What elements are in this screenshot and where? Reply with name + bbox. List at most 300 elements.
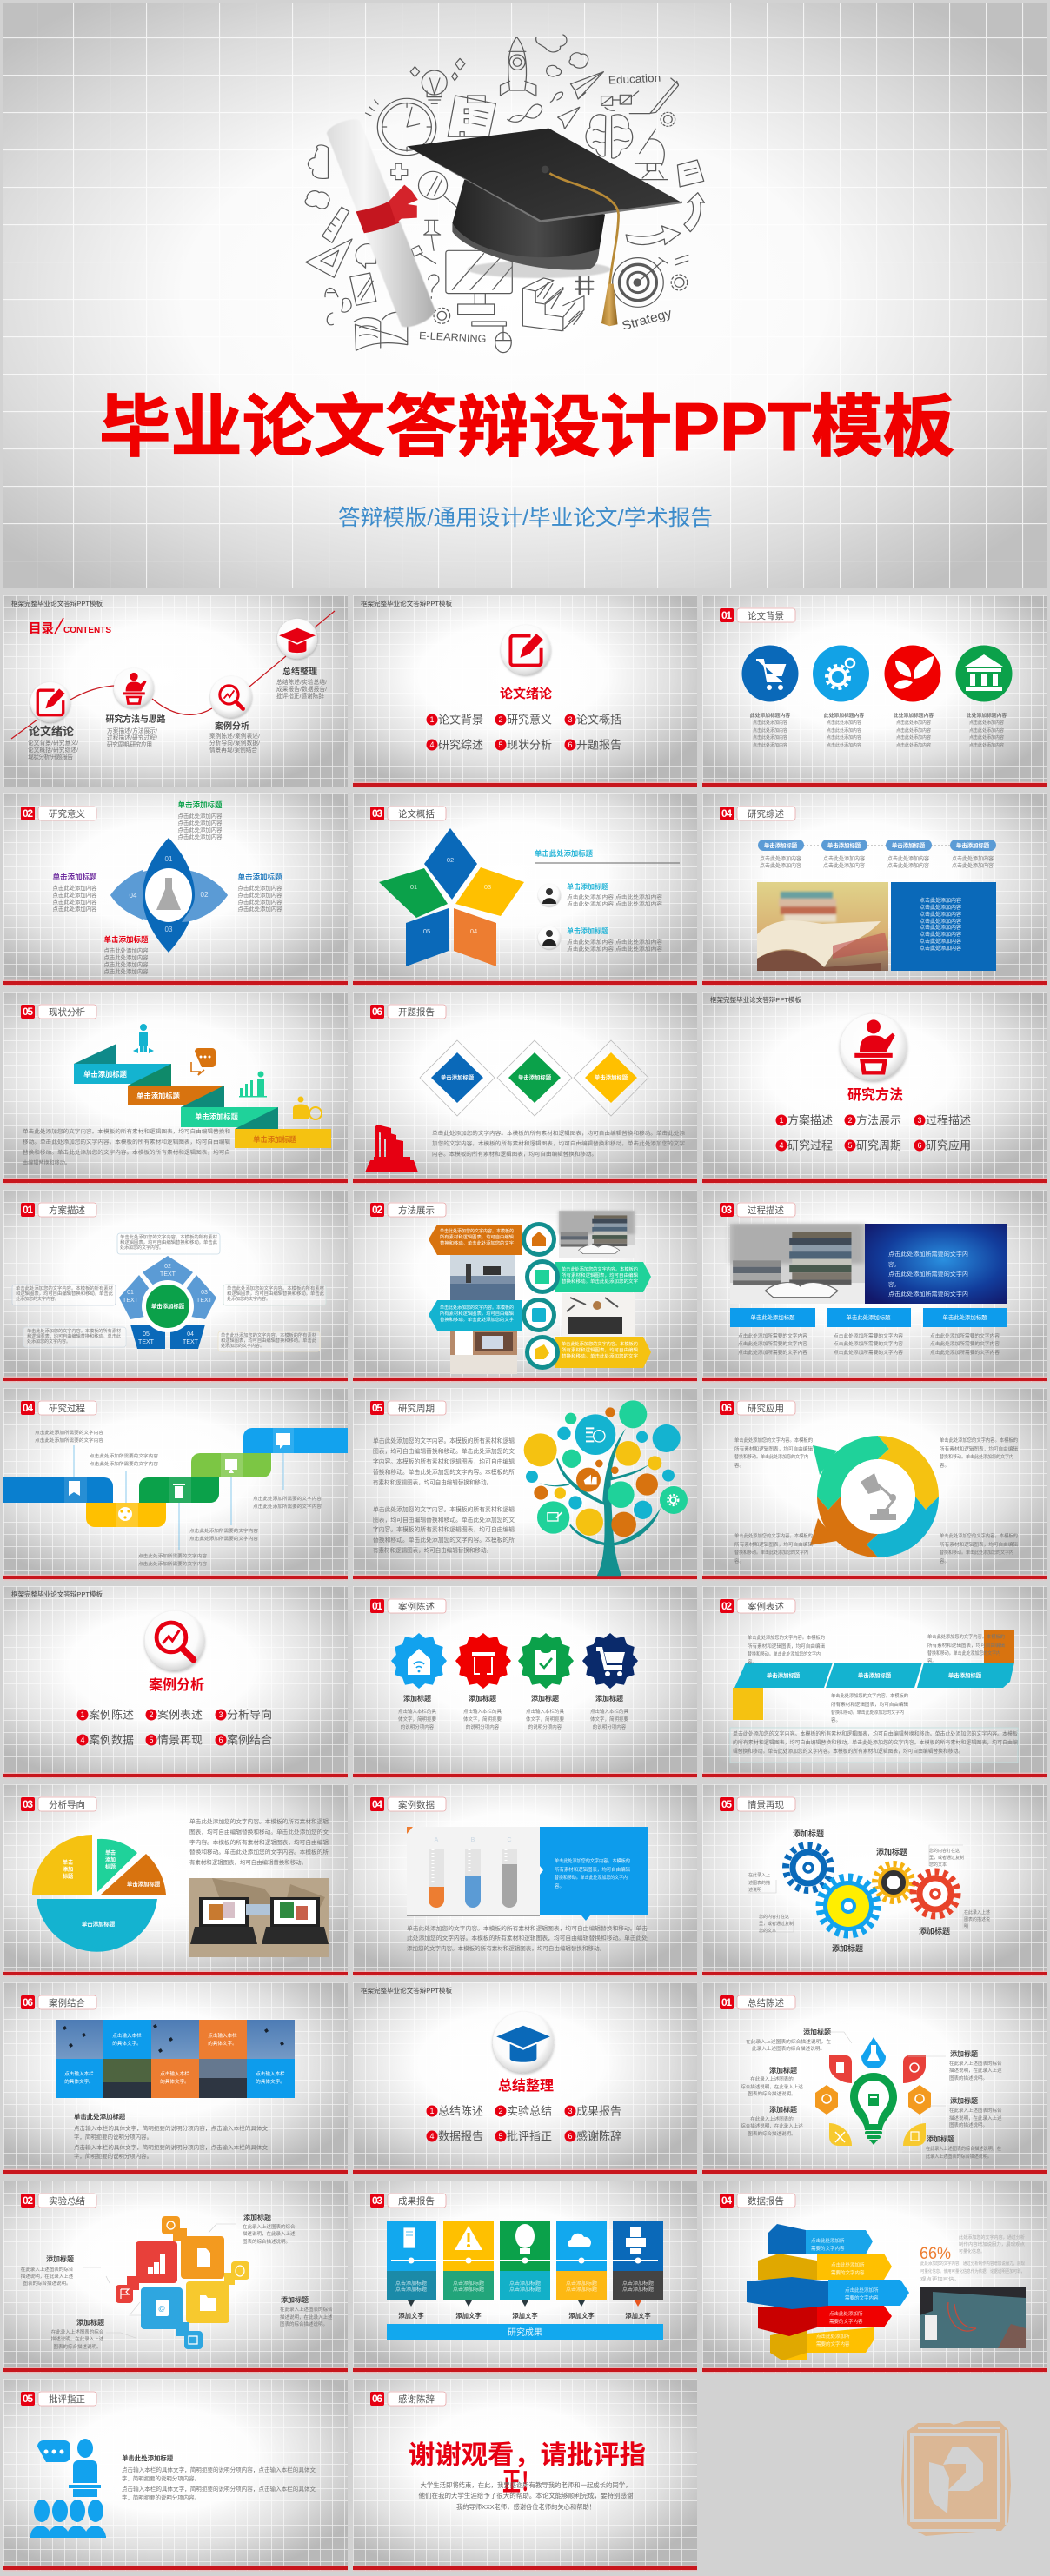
photo and text grid: 的具体文字。 <box>160 2078 189 2085</box>
panel: 现状分析 <box>3 992 348 1184</box>
panel: 论文背景 <box>702 595 1047 787</box>
text labels: 添加标题 <box>927 2134 954 2143</box>
section list: 过程描述 <box>926 1114 971 1126</box>
panel: 研究应用 <box>702 1388 1047 1580</box>
arrows with text: 替换和移动。单击此处添加您的文字 <box>562 1278 638 1285</box>
panel: section 案例分析 <box>3 1586 348 1778</box>
small notes with leaders <box>748 1845 990 1934</box>
three blue boxes: 单击此处添加标题 <box>846 1313 891 1321</box>
paragraphs: 替换和移动。单击此处添加您的文字内 <box>734 1453 808 1460</box>
closing message: 正！ <box>502 2468 539 2497</box>
header tag: 01 <box>721 609 732 621</box>
paragraph: 添加您的文字内容。本模板的所有素材和逻辑图表，均可自由编辑替换和移动。 <box>407 1944 605 1952</box>
paragraphs: 容。 <box>734 1462 744 1469</box>
diagram: pentagon cycle: TEXT <box>183 1339 199 1345</box>
pills row: 点击此处添加内容 <box>823 855 865 862</box>
labels: 点击此处添加内容 <box>827 742 861 748</box>
labels: 的说明分项内容 <box>528 1723 562 1730</box>
diagram: pentagon cycle: TEXT <box>160 1271 176 1278</box>
labels: 点击此处添加内容 <box>237 891 282 899</box>
step: 研究方法与思路 <box>106 668 165 748</box>
paragraphs: 单击此处添加您的文字内容。本模板的所有素材和逻辑 <box>373 1505 515 1513</box>
three blue boxes: 单击此处添加标题 <box>942 1313 987 1321</box>
blue text panel: 点击此处添加所需要的文字内 <box>888 1250 968 1258</box>
text block: 点击输入本栏的具体文字，简明扼要的说明分项内容，点击输入本栏的具体文 <box>122 2485 316 2493</box>
header tag <box>720 807 795 820</box>
section list: 案例结合 <box>227 1733 272 1747</box>
header tag <box>370 2392 446 2406</box>
pills row: 单击添加标题 <box>764 841 798 849</box>
labels: 点击此处添加内容 <box>827 727 861 734</box>
small notes with leaders: 里，或者通过复制 <box>759 1921 794 1927</box>
three blue boxes: 点击此处添加所需要的文字内容 <box>738 1332 808 1339</box>
diagram: stacked arrows: 需要的文字内容 <box>829 2318 863 2325</box>
pills row: 点击此处添加内容 <box>760 862 801 869</box>
text labels: 综合描述说明，在此录入上述 <box>741 2083 803 2090</box>
pills row: 点击此处添加内容 <box>952 862 994 869</box>
text block: 单击此处添加标题 <box>122 2454 174 2462</box>
labels: 单击添加标题 <box>103 935 149 944</box>
bordered summary <box>730 1728 1018 1763</box>
text blocks: 所有素材和逻辑图表，均可自由编辑 <box>748 1643 825 1650</box>
section list: 情景再现 <box>157 1733 203 1747</box>
panel: 研究过程 <box>3 1388 348 1580</box>
header tag <box>21 807 96 820</box>
labels: 点击输入本栏的具 <box>590 1708 628 1715</box>
header tag <box>370 1599 446 1613</box>
diagram: stacked arrows: 需要的文字内容 <box>845 2294 879 2301</box>
template label: 框架完整毕业论文答辩PPT模板 <box>710 995 801 1004</box>
labels: 此处添加标题内容 <box>824 712 864 719</box>
chart: test tubes: A <box>435 1837 439 1843</box>
five columns: 点击添加标题 <box>622 2280 654 2287</box>
text labels: 图表的综合描述说明。 <box>53 2343 102 2350</box>
section list: 1 <box>80 1710 85 1719</box>
callout boxes <box>12 1233 326 1351</box>
paragraph: 单击此处添加您的文字内容。本模板的所有素材和逻辑图表，均可自由编辑替换和移动。单击此处添 <box>432 1130 685 1137</box>
diagram: four petals: 02 <box>201 891 209 899</box>
section list: 成果报告 <box>576 2105 621 2117</box>
small notes with leaders: 明 <box>964 1924 968 1929</box>
header tag: 方案描述 <box>49 1205 85 1216</box>
icon: speaker ball <box>841 1014 907 1080</box>
blue text panel: 点击此处添加内容 <box>920 931 961 938</box>
panel: 方案描述 <box>3 1190 348 1382</box>
paragraphs: 所有素材和逻辑图表，均可自由编辑 <box>940 1541 1018 1548</box>
illustration: doodles, diploma and graduation cap <box>305 35 704 353</box>
text labels: 描述说明，在此录入上述 <box>280 2314 333 2320</box>
arrows with text: 替换和移动。单击此处添加您的文字 <box>440 1240 514 1246</box>
panel: 分析导向 <box>3 1784 348 1976</box>
blue panel: 替换和移动。单击此处添加您的文字内 <box>555 1874 628 1881</box>
panel: section 研究方法 <box>702 992 1047 1184</box>
labels: 点击输入本栏的具 <box>398 1708 436 1715</box>
step: 研究方法与思路: 研究方法与思路 <box>106 714 165 725</box>
pills row: 单击添加标题 <box>892 841 926 849</box>
stair ribbon <box>74 1044 331 1148</box>
chart: exploded pie: 标题 <box>63 1873 74 1880</box>
paragraph: 替换和移动。单击此处添加您的文字内容。本模板的所 <box>189 1848 329 1856</box>
labels: 点击此处添加内容 <box>103 946 149 954</box>
stepped ribbon <box>3 1428 348 1527</box>
section list <box>426 713 621 751</box>
paragraphs: 所有素材和逻辑图表，均可自由编辑 <box>940 1445 1018 1452</box>
blue panel <box>540 1827 648 1921</box>
text labels: 添加标题 <box>950 2049 978 2058</box>
header tag <box>370 1797 446 1811</box>
section list: 2 <box>847 1116 853 1125</box>
labels: 单击添加标题 <box>52 873 97 881</box>
small notes with leaders: 您的内容打在这 <box>759 1914 789 1920</box>
step: 案例分析: 情景再现/案例结合 <box>209 746 257 754</box>
text labels: 图表的综合描述说明。 <box>280 2320 328 2327</box>
diagram: linked tiles <box>116 2216 249 2349</box>
section list: 1 <box>429 715 435 724</box>
text labels: 在此录入上述图表的 <box>750 2115 794 2122</box>
labels: 点击此处添加内容 <box>969 734 1004 740</box>
diagram: stacked arrows: 点击此处添加所 <box>845 2287 879 2294</box>
bordered summary: 的所有素材和逻辑图表，均可自由编辑替换和移动。单击此处添加您的文字内容。本模板的所有素材和逻辑图表，均可自由编 <box>733 1739 1018 1746</box>
header tag <box>370 1005 446 1019</box>
paragraphs: 字内容。本模板的所有素材和逻辑图表，均可自由编辑 <box>373 1525 515 1533</box>
chart: test tubes: C <box>507 1837 512 1843</box>
text blocks: 所有素材和逻辑图表，均可自由编辑 <box>927 1642 1005 1649</box>
paragraph <box>407 1924 648 1952</box>
arrows with text: 所有素材和逻辑图表，均可自由编辑 <box>562 1272 638 1278</box>
five columns: 点击添加标题 <box>566 2280 597 2287</box>
paragraphs: 所有素材和逻辑图表，均可自由编辑 <box>734 1445 813 1452</box>
five columns: 添加文字 <box>512 2312 538 2320</box>
section list: 方案描述 <box>788 1114 833 1126</box>
stair ribbon: 单击添加标题 <box>195 1112 239 1121</box>
panel: 数据报告 <box>702 2181 1047 2373</box>
text blocks: 单击此处添加您的文字内容。本模板的 <box>831 1692 908 1699</box>
side text: 此处添加您的文字内容，通过分析制作内容增加说服力，展现 <box>920 2261 1025 2267</box>
gear titles: 添加标题 <box>832 1943 863 1953</box>
five columns: 点击添加标题 <box>509 2286 541 2293</box>
labels: 点击此处添加内容 <box>52 898 97 906</box>
closing message <box>409 2441 646 2497</box>
labels: 点击此处添加内容 <box>896 742 931 748</box>
step labels: 点击此处添加所需要的文字内容 <box>35 1430 103 1436</box>
icon: magnifier ball <box>144 1611 205 1670</box>
section list: 方法展示 <box>856 1114 901 1126</box>
header tag: 05 <box>721 1798 732 1810</box>
callout boxes: 和逻辑图表，均可自由编辑替换和移动。单击此 <box>221 1338 316 1344</box>
header tag: 案例数据 <box>398 1799 435 1810</box>
diamonds <box>420 1040 648 1116</box>
small notes with leaders: 您的内容打在这 <box>929 1848 960 1854</box>
text blocks: 容。 <box>927 1657 937 1664</box>
step: 总结整理: 总结陈述/实验总结/ <box>276 678 327 686</box>
icon: books on laptop <box>365 1125 418 1172</box>
side text: 此处添加您的文字内容，通过分析 <box>959 2234 1025 2241</box>
panel: 案例表述 <box>702 1586 1047 1778</box>
icon: person with coin <box>293 1097 322 1119</box>
paragraphs: 所有素材和逻辑图表，均可自由编辑 <box>734 1541 813 1548</box>
three blue boxes: 点击此处添加所需要的文字内容 <box>834 1340 904 1347</box>
blue text panel: 点击此处添加内容 <box>920 897 961 904</box>
labels: 点击此处添加内容 <box>753 734 788 740</box>
big number: 66% <box>920 2245 951 2263</box>
blue text panel: 点击此处添加内容 <box>920 924 961 931</box>
blue text panel: 点击此处添加内容 <box>920 918 961 925</box>
section title: 总结整理 <box>498 2077 554 2094</box>
text labels: 在此录入上述图表的综合 <box>949 2107 1002 2114</box>
section list: 分析导向 <box>227 1709 272 1721</box>
paragraphs <box>373 1437 515 1554</box>
header tag: 04 <box>23 1402 33 1414</box>
labels: 点击此处添加内容 <box>103 967 149 975</box>
pills row: 点击此处添加内容 <box>760 855 801 862</box>
panel: 总结陈述 <box>702 1982 1047 2174</box>
panel: 案例数据 <box>353 1784 697 1976</box>
panel: 论文概括 <box>353 793 697 986</box>
header tag: 06 <box>372 2393 382 2405</box>
side text: 制作内容增加说服力，展现观点 <box>959 2241 1025 2247</box>
callout boxes: 和逻辑图表，均可自由编辑替换和移动。单击此 <box>227 1291 324 1297</box>
blue text panel: 容。 <box>888 1280 900 1288</box>
text labels: 添加标题 <box>769 2105 797 2114</box>
header tag <box>21 2194 96 2208</box>
diagram: pentagon cycle: 03 <box>201 1290 208 1296</box>
blue panel: 容。 <box>555 1882 564 1889</box>
diagram: linked tiles: @ <box>158 2305 165 2313</box>
title: 毕业论文答辩设计PPT模板 <box>99 388 954 465</box>
diagram: pentagon cycle: TEXT <box>123 1298 139 1304</box>
paragraphs: 替换和移动。单击此处添加您的文字内容。本模板的所 <box>373 1468 515 1476</box>
small notes with leaders: 图表的描述说 <box>964 1916 990 1922</box>
section list: 4 <box>80 1736 85 1744</box>
section list: 案例陈述 <box>89 1709 134 1721</box>
right text block: 点击此处添加内容 点击此处添加内容 <box>567 900 663 907</box>
labels: 此处添加标题内容 <box>894 712 934 719</box>
pills row: 点击此处添加内容 <box>952 855 994 862</box>
callout boxes: 单击此处添加您的文字内容。本模板的所有素材 <box>221 1332 316 1338</box>
labels: 此处添加标题内容 <box>967 712 1007 719</box>
right text block: 点击此处添加内容 点击此处添加内容 <box>567 893 663 900</box>
heading: contents <box>29 618 111 636</box>
side text: 观点更加可信。 <box>920 2276 960 2282</box>
template label: 框架完整毕业论文答辩PPT模板 <box>11 1590 103 1598</box>
header tag: 05 <box>23 1006 33 1018</box>
header tag: 过程描述 <box>748 1205 784 1216</box>
diagram: stacked arrows: 点击此处添加所 <box>829 2310 863 2317</box>
header tag: 感谢陈辞 <box>398 2393 435 2405</box>
header tag: 02 <box>23 2194 33 2207</box>
header tag <box>21 1797 96 1811</box>
section list: 研究意义 <box>507 713 552 727</box>
arrows with text: 所有素材和逻辑图表，均可自由编辑 <box>440 1234 514 1240</box>
section list: 现状分析 <box>507 739 552 751</box>
diagram: pentagon cycle <box>119 1256 216 1349</box>
gear titles: 添加标题 <box>793 1829 824 1838</box>
three blue boxes <box>730 1308 1007 1356</box>
three blue boxes: 点击此处添加所需要的文字内容 <box>738 1340 808 1347</box>
header tag: 开题报告 <box>398 1006 435 1018</box>
right text block: 点击此处添加内容 点击此处添加内容 <box>567 946 663 953</box>
text labels: 描述说明，在此录入上述 <box>243 2230 296 2237</box>
step: 研究方法与思路: 方案描述/方法展示/ <box>107 727 157 734</box>
five columns: 点击添加标题 <box>566 2286 597 2293</box>
arrows with text: 单击此处添加您的文字内容。本模板的 <box>562 1341 638 1347</box>
step: 案例分析: 分析导向/案例数据/ <box>209 739 260 747</box>
five columns: 点击添加标题 <box>509 2280 541 2287</box>
template label: 框架完整毕业论文答辩PPT模板 <box>11 599 103 607</box>
text labels: 描述说明，在此录入上述 <box>949 2115 1002 2121</box>
section list: 3 <box>218 1710 223 1719</box>
side text <box>920 2234 1025 2282</box>
text labels: 在此录入上述图表的综合 <box>280 2306 333 2313</box>
step: 论文绪论: 现状分析/开题报告 <box>28 753 73 760</box>
photo: open book <box>757 882 888 971</box>
labels: 点击此处添加内容 <box>969 727 1004 734</box>
paragraphs: 单击此处添加您的文字内容。本模板的 <box>940 1437 1018 1444</box>
closing message: 谢谢观看，请批评指 <box>409 2441 646 2470</box>
labels: 的说明分项内容 <box>466 1723 500 1730</box>
five columns: 添加文字 <box>568 2312 595 2320</box>
blue text panel <box>891 882 996 971</box>
labels: 单击添加标题 <box>177 800 223 809</box>
ring icons <box>522 1222 560 1370</box>
text blocks: 替换和移动。单击此处添加您的文字内 <box>831 1709 904 1716</box>
chart: exploded pie: 标题 <box>105 1863 116 1870</box>
panel: 成果报告 <box>353 2181 697 2373</box>
arrows with text: 所有素材和逻辑图表，均可自由编辑 <box>562 1347 638 1353</box>
text labels: 添加标题 <box>769 2066 797 2075</box>
arrows with text: 单击此处添加您的文字内容。本模板的 <box>440 1305 514 1311</box>
text labels: 在此录入上述图表的 <box>750 2075 794 2082</box>
header tag <box>21 2392 96 2406</box>
closing text: 大学生活即将结束，在此，我要感谢所有教导我的老师和一起成长的同学， <box>421 2481 631 2489</box>
section list: 4 <box>779 1141 784 1150</box>
callout boxes: 处添加您的文字内容。 <box>221 1343 264 1349</box>
paragraph: 图表，均可自由编辑替换和移动。单击此处添加您的文 <box>189 1828 329 1836</box>
diagram: four petals: 03 <box>165 926 173 933</box>
section list: 5 <box>149 1736 154 1744</box>
labels: 点击此处添加内容 <box>896 727 931 734</box>
paragraphs: 图表，均可自由编辑替换和移动。单击此处添加您的文 <box>373 1447 515 1455</box>
text blocks: 替换和移动。单击此处添加您的文字内 <box>927 1650 1000 1656</box>
header tag: 03 <box>372 807 382 820</box>
panel: contents <box>3 595 348 787</box>
section list: 5 <box>847 1141 853 1150</box>
right text block: 点击此处添加内容 点击此处添加内容 <box>567 939 663 946</box>
three blue boxes: 点击此处添加所需要的文字内容 <box>930 1340 1000 1347</box>
section list: 3 <box>568 2107 573 2115</box>
labels: 点击输入本栏的具 <box>526 1708 564 1715</box>
step: 总结整理 <box>276 619 327 700</box>
header tag: 情景再现 <box>748 1799 784 1810</box>
paragraph <box>432 1130 685 1158</box>
logo: stamp watermark <box>901 2421 1011 2536</box>
labels: 添加标题 <box>469 1694 496 1703</box>
paragraphs: 容。 <box>940 1462 949 1469</box>
template label: 框架完整毕业论文答辩PPT模板 <box>361 599 452 607</box>
header tag <box>720 2194 795 2208</box>
stair ribbon: 单击添加标题 <box>83 1070 128 1079</box>
diagram: four petals <box>110 838 228 953</box>
five columns: 点击添加标题 <box>395 2280 427 2287</box>
step labels: 点击此处添加所需要的文字内容 <box>253 1504 322 1510</box>
labels: 点击此处添加内容 <box>753 727 788 734</box>
callout boxes: 和逻辑图表，均可自由编辑替换和移动。单击此 <box>120 1239 217 1245</box>
header tag <box>720 608 795 622</box>
text blocks: 替换和移动。单击此处添加您的文字内 <box>748 1650 821 1657</box>
paragraph: 由编辑替换和移动。 <box>23 1159 70 1166</box>
diagram: stacked arrows: 点击此处添加所 <box>811 2237 845 2244</box>
header tag: 05 <box>372 1402 382 1414</box>
paragraph: 此处添加您的文字内容。本模板的所有素材和逻辑图表，均可自由编辑替换和移动。单击此处 <box>407 1934 648 1942</box>
callout boxes: 和逻辑图表，均可自由编辑替换和移动。单击此 <box>16 1291 113 1297</box>
right text block <box>535 849 680 953</box>
section list: 研究综述 <box>438 739 483 751</box>
section list: 总结陈述 <box>438 2105 483 2117</box>
labels: 点击此处添加内容 <box>969 742 1004 748</box>
text blocks: 所有素材和逻辑图表，均可自由编辑 <box>831 1701 908 1708</box>
text block <box>122 2454 316 2501</box>
text labels <box>21 2213 333 2350</box>
five columns: 添加文字 <box>455 2312 482 2320</box>
paragraphs: 容。 <box>734 1557 744 1564</box>
step: 论文绪论: 论文绪论 <box>29 725 74 738</box>
heading: contents: 目录 <box>29 621 54 636</box>
diagram: stacked arrows: 点击此处添加所 <box>831 2261 865 2268</box>
icon: graduation cap <box>407 129 682 326</box>
text labels: 描述说明，在此录入上述 <box>51 2335 104 2342</box>
callout boxes: 处添加您的文字内容。 <box>227 1296 270 1302</box>
paragraph: 加您的文字内容。本模板的所有素材和逻辑图表，均可自由编辑替换和移动。单击此处添加您的文字 <box>432 1140 685 1147</box>
header tag: 04 <box>372 1798 382 1810</box>
text labels: 此录入上述图表的综合描述说明。 <box>926 2153 992 2160</box>
paragraphs: 图表，均可自由编辑替换和移动。单击此处添加您的文 <box>373 1516 515 1524</box>
labels: 的说明分项内容 <box>401 1723 435 1730</box>
chart: exploded pie: 单击添加标题 <box>127 1880 161 1888</box>
section list: 研究过程 <box>788 1139 833 1152</box>
arrows with text: 所有素材和逻辑图表，均可自由编辑 <box>440 1311 514 1317</box>
section list: 研究周期 <box>856 1139 901 1152</box>
panel: 研究综述 <box>702 793 1047 986</box>
paragraph <box>23 1128 230 1166</box>
paragraph <box>189 1817 329 1866</box>
header tag: 实验总结 <box>49 2195 85 2207</box>
section list: 5 <box>498 2132 503 2141</box>
icon: edit ball <box>501 625 551 675</box>
labels: 点击此处添加内容 <box>753 720 788 726</box>
photos <box>450 1211 635 1374</box>
paragraph: 有素材和逻辑图表，均可自由编辑替换和移动。 <box>189 1858 307 1866</box>
step: 案例分析: 案例分析 <box>215 720 249 732</box>
callout boxes: 单击此处添加您的文字内容。本模板的所有素材 <box>16 1285 113 1291</box>
paragraphs: 单击此处添加您的文字内容。本模板的 <box>734 1437 813 1444</box>
text blocks: 单击此处添加您的文字内容。本模板的 <box>748 1634 825 1641</box>
section list: 1 <box>779 1116 784 1125</box>
header tag <box>370 1203 446 1217</box>
panel: 过程描述 <box>702 1190 1047 1382</box>
panel: 实验总结 <box>3 2181 348 2373</box>
diagram: pentagon cycle: 单击添加标题 <box>151 1302 185 1310</box>
text labels: 在此录入上述图表的综合 <box>243 2223 296 2230</box>
panel: section 论文绪论 <box>353 595 697 787</box>
callout boxes: 和逻辑图表，均可自由编辑替换和移动。单击此 <box>27 1333 121 1339</box>
header tag: 研究意义 <box>49 808 85 820</box>
section list: 2 <box>149 1710 154 1719</box>
header tag <box>21 1401 96 1415</box>
step labels: 点击此处添加所需要的文字内容 <box>138 1553 207 1559</box>
arrows with text: 替换和移动。单击此处添加您的文字 <box>440 1317 514 1323</box>
labels: 点击输入本栏的具 <box>463 1708 502 1715</box>
text block: 点击输入本栏的具体文字，简明扼要的说明分项内容，点击输入本栏的具体文 <box>74 2124 269 2132</box>
